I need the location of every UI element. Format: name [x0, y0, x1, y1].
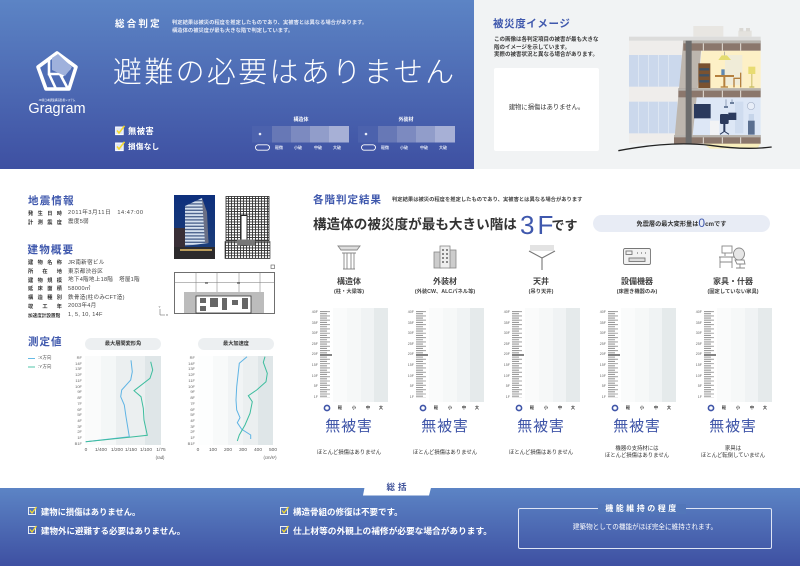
gauge: structure and exterior: 外装材 [398, 116, 414, 122]
column: equipment: 5F [602, 384, 606, 388]
column: structure: 30F [312, 331, 318, 335]
column: structure: 35F [312, 321, 318, 325]
heading: earthquake info: 地震情報 [28, 195, 75, 207]
column: exterior: 20F [408, 352, 414, 356]
chart: max acceleration: 10F [188, 384, 195, 389]
building overview rows: 竣工年 [28, 304, 62, 310]
building overview rows: JR南新宿ビル [68, 260, 105, 266]
column: exterior: 5F [410, 384, 414, 388]
chart: max acceleration: 5F [190, 412, 195, 417]
chart: max acceleration: 500 [269, 448, 277, 453]
chart: max story drift angle: 5F [77, 412, 82, 417]
earthquake info rows: 計測震度 [28, 220, 62, 226]
earthquake info rows: 発生日時 [28, 210, 62, 216]
column: structure: 5F [314, 384, 318, 388]
chart: max story drift angle: 14F [75, 361, 82, 366]
icon: ceiling [528, 245, 556, 270]
verdict note: 構造体の被災度が最も大きな階で判定しています。 [172, 28, 293, 34]
column: exterior: 30F [408, 331, 414, 335]
column: ceiling: 5F [506, 384, 510, 388]
column: ceiling: 20F [504, 352, 510, 356]
checklist: verdict: 損傷なし [128, 142, 160, 150]
drawing: floor plan: X [166, 313, 168, 317]
column: furniture: 小 [736, 404, 740, 410]
logo: Gragram [28, 51, 86, 117]
column: exterior: 小 [448, 404, 452, 410]
summary checklist [28, 506, 492, 536]
headline: most damaged floor: です [552, 218, 578, 232]
icon: building [434, 246, 456, 268]
chart: max acceleration: 12F [188, 372, 195, 377]
column: exterior: 35F [408, 321, 414, 325]
building overview rows: 地下4階地上18階 塔屋1階 [68, 277, 140, 283]
column: furniture [696, 246, 772, 459]
column: furniture: 15F [696, 363, 702, 367]
column: ceiling: 15F [504, 363, 510, 367]
column: ceiling: 小 [544, 404, 548, 410]
gauge: structure and exterior [293, 116, 414, 122]
chart: max acceleration: 4F [190, 418, 195, 423]
heading: measured values: 測定値 [28, 336, 62, 348]
chart: max acceleration: 7F [190, 401, 195, 406]
chart: max story drift angle: 11F [75, 378, 82, 383]
chart title [198, 338, 274, 350]
box text: 建築物としての機能がほぼ完全に維持されます。 [573, 524, 717, 531]
chart: max story drift angle: 4F [77, 418, 82, 423]
column: structure: 構造体 [337, 276, 361, 286]
chart: max acceleration: 100 [209, 448, 217, 453]
chart title [85, 338, 161, 350]
verdict note: 判定結果は被災の程度を推定したものであり、実被害とは異なる場合があります。 [172, 20, 367, 26]
column: structure: 無被害 [325, 418, 373, 435]
earthquake info rows: 2011年3月11日 14:47:00 [68, 210, 144, 216]
logo: Gragram: Gragram [28, 101, 86, 117]
chart: max story drift angle: 1/150 [125, 448, 137, 453]
column: furniture: 軽 [722, 404, 726, 410]
column: equipment: 35F [600, 321, 606, 325]
building overview rows: 58000㎡ [68, 286, 91, 292]
column: furniture: (固定していない家具) [707, 288, 759, 294]
summary checklist: 建物に損傷はありません。 [41, 506, 140, 516]
panel: damage image [474, 0, 800, 169]
column: furniture: 10F [696, 374, 702, 378]
chart: max acceleration [188, 338, 277, 460]
earthquake info rows: 震度5弱 [68, 219, 89, 225]
message box [494, 68, 599, 151]
column: ceiling: 無被害 [517, 418, 565, 435]
chart: max story drift angle: 6F [77, 406, 82, 412]
column: ceiling: 中 [558, 404, 562, 410]
column: furniture: 中 [750, 404, 754, 410]
chart: max story drift angle: 12F [75, 372, 82, 377]
gauge: structure and exterior: 構造体 [293, 116, 308, 122]
column: exterior [408, 246, 484, 456]
chart: max story drift angle: 9F [77, 389, 82, 394]
chart: max story drift angle: 8F [77, 395, 82, 400]
summary heading: 総括 [386, 482, 410, 492]
column: ceiling: 30F [504, 331, 510, 335]
chart: max acceleration: 1F [190, 435, 195, 440]
column: structure: 大 [379, 404, 383, 410]
column: ceiling: 25F [504, 342, 510, 346]
column: equipment: 15F [600, 363, 606, 367]
column: furniture: 30F [696, 331, 702, 335]
column: structure: 中 [366, 404, 370, 410]
checklist: verdict [115, 125, 160, 152]
column: exterior: 15F [408, 363, 414, 367]
column: furniture: 無被害 [709, 418, 757, 435]
chart: max story drift angle: 1/400 [95, 448, 107, 453]
column: exterior: 中 [462, 404, 466, 410]
column: structure: 15F [312, 363, 318, 367]
chart: max story drift angle: 3F [77, 424, 82, 429]
column: furniture: 25F [696, 342, 702, 346]
column: equipment: 1F [602, 395, 606, 399]
chart: max story drift angle: 1/200 [111, 448, 123, 453]
column: structure: ほとんど損傷はありません [317, 450, 381, 456]
column: exterior: 無被害 [421, 418, 469, 435]
chart: max acceleration: 0 [197, 448, 199, 453]
headline: most damaged floor: 構造体の被災度が最も大きい階は [313, 217, 517, 232]
damage image note: この画像は各判定項目の被害が最も大きな [494, 37, 599, 43]
column: ceiling: 1F [506, 395, 510, 399]
column: structure: 20F [312, 352, 318, 356]
gauge labels: 大破 [333, 145, 341, 150]
column: exterior: (外装CW、ALCパネル等) [415, 288, 475, 294]
column: ceiling: 10F [504, 374, 510, 378]
gauge labels: 小破 [294, 145, 302, 150]
chart: max acceleration: RF [190, 355, 195, 360]
column: structure: (柱・大梁等) [334, 288, 364, 294]
column: ceiling: ほとんど損傷はありません [509, 450, 573, 456]
column: equipment: 中 [654, 404, 658, 410]
building overview rows: 東京都渋谷区 [68, 268, 103, 274]
logo: Gragram: JR東日本建築構造監視システム [39, 98, 76, 102]
legend: directions: :Y方向 [38, 364, 52, 368]
chart: max story drift angle: 10F [75, 384, 82, 389]
illustration: building cross-section [618, 26, 772, 152]
gauge labels [255, 144, 447, 151]
panel: summary [0, 488, 800, 566]
heading: results by floor: 各階判定結果 [313, 194, 382, 206]
heading: overall verdict: 総合判定 [115, 18, 162, 30]
column: equipment [600, 248, 676, 459]
column: exterior: 軽 [434, 404, 438, 410]
chart: max story drift angle: 1/100 [140, 448, 152, 453]
column: equipment: ほとんど損傷はありません [605, 453, 669, 459]
chart: max story drift angle: 2F [77, 429, 82, 434]
column: equipment: 30F [600, 331, 606, 335]
column: furniture: 35F [696, 321, 702, 325]
column: furniture: 家具・什器 [713, 276, 753, 286]
column: exterior: 40F [408, 310, 414, 314]
chart: max acceleration: 400 [254, 448, 262, 453]
chart: max acceleration: 11F [188, 378, 195, 383]
column: ceiling: 天井 [533, 276, 549, 286]
column: ceiling: 大 [571, 404, 575, 410]
gauge labels: 大破 [439, 145, 447, 150]
chart: max acceleration: 2F [190, 429, 195, 434]
chart: max acceleration: 9F [190, 389, 195, 394]
chart: max story drift angle: RF [77, 355, 82, 360]
building overview rows [28, 259, 140, 318]
chart title: 最大層間変形角 [105, 341, 141, 347]
damage image note: 実際の被害状況と異なる場合があります。 [494, 52, 598, 58]
legend: directions [28, 354, 52, 368]
headline: most damaged floor [313, 210, 578, 240]
column: exterior: 大 [475, 404, 479, 410]
chart: max story drift angle: 0 [85, 448, 87, 453]
column: structure: 1F [314, 395, 318, 399]
chart: max story drift angle [74, 338, 166, 460]
column: equipment: 設備機器 [621, 276, 653, 286]
building overview rows: 建物名称 [28, 260, 62, 266]
message box: 建物に損傷はありません。 [509, 104, 584, 111]
photo: building [174, 195, 215, 259]
chart: max acceleration: B1F [188, 441, 195, 446]
chart: max story drift angle: 1/75 [156, 448, 166, 453]
column: furniture: 5F [698, 384, 702, 388]
column: equipment: 軽 [626, 404, 630, 410]
chart title: 最大加速度 [223, 341, 249, 347]
building overview rows: 所在地 [28, 269, 62, 275]
chart: max story drift angle: (rad) [156, 454, 164, 460]
building overview rows: 建物規模 [28, 278, 62, 284]
column: furniture: 1F [698, 395, 702, 399]
panel: overall verdict header [0, 0, 474, 169]
gauge labels: 軽微 [275, 145, 283, 150]
chart: max acceleration: 300 [239, 448, 247, 453]
drawing: floor plan [158, 264, 275, 317]
summary checklist: 建物外に避難する必要はありません。 [41, 526, 185, 536]
summary checklist: 構造骨組の修復は不要です。 [293, 506, 403, 516]
box heading: 機能維持の程度 [605, 504, 679, 513]
gauge labels: 軽微 [381, 145, 389, 150]
heading: damage image: 被災度イメージ [493, 18, 570, 30]
summary checklist: 仕上材等の外観上の補修が必要な場合があります。 [293, 526, 492, 536]
column: exterior: 1F [410, 395, 414, 399]
chart: max acceleration: (cm/s²) [263, 454, 277, 460]
damage image note: 階のイメージを示しています。 [494, 44, 570, 50]
chart: max acceleration: 6F [190, 406, 195, 412]
column: furniture: 40F [696, 310, 702, 314]
column: structure: 25F [312, 342, 318, 346]
chart: max acceleration: 200 [224, 448, 232, 453]
column: ceiling [504, 245, 580, 456]
callout: max deformation [593, 215, 770, 232]
column: structure: 軽 [338, 404, 342, 410]
column: furniture: 家具は [725, 446, 741, 452]
column: exterior: ほとんど損傷はありません [413, 450, 477, 456]
column: ceiling: (吊り天井) [529, 288, 553, 294]
column: structure [312, 246, 388, 456]
chart: max acceleration: 14F [188, 361, 195, 366]
chart: max story drift angle: 7F [77, 401, 82, 406]
column: structure: 小 [352, 404, 356, 410]
icon: furniture [719, 246, 746, 268]
results note: 判定結果は被災の程度を推定したものであり、実被害とは異なる場合があります [392, 196, 582, 202]
gauge labels: 中破 [314, 145, 322, 150]
building overview rows: 2003年4月 [68, 303, 96, 309]
column: ceiling: 40F [504, 310, 510, 314]
legend: directions: :X方向 [38, 355, 52, 360]
column: equipment: (床置き機器のみ) [617, 288, 657, 294]
column: equipment: 無被害 [613, 418, 661, 435]
building overview rows: 構造種別 [28, 295, 62, 301]
icon: pillar [337, 246, 361, 270]
callout: max deformation: 免震層の最大変形量は0cmです [637, 216, 726, 230]
chart: max story drift angle: 1F [77, 435, 82, 440]
column: exterior: 10F [408, 374, 414, 378]
drawing: floor plan: Y [158, 305, 161, 309]
building overview rows: 延床面積 [28, 286, 62, 292]
column: exterior: 25F [408, 342, 414, 346]
column: equipment: 機器の支持材には [615, 446, 659, 452]
column: furniture: 大 [763, 404, 767, 410]
headline: most damaged floor: 3F [520, 210, 556, 240]
verdict note [172, 19, 367, 34]
column: equipment: 大 [667, 404, 671, 410]
chart: max acceleration: 13F [188, 366, 195, 371]
checklist: verdict: 無被害 [128, 126, 154, 136]
box: function maintenance [518, 508, 772, 549]
verdict title: 避難の必要はありません [113, 57, 456, 89]
building overview rows: 鉄骨造(柱のみCFT造) [68, 294, 125, 300]
building overview rows: 加速度計設置階 [28, 312, 60, 318]
chart: max acceleration: 8F [190, 395, 195, 400]
column: equipment: 40F [600, 310, 606, 314]
heading: building overview: 建物概要 [28, 244, 74, 256]
column: ceiling: 35F [504, 321, 510, 325]
earthquake info rows [28, 209, 144, 226]
gauge labels: 小破 [400, 145, 408, 150]
column: structure: 40F [312, 310, 318, 314]
column: structure: 10F [312, 374, 318, 378]
icon: equipment [623, 248, 651, 265]
gauge labels: 中破 [420, 145, 428, 150]
chart: max story drift angle: B1F [75, 441, 82, 446]
building overview rows: 1, 5, 10, 14F [68, 312, 103, 318]
damage image note [494, 36, 599, 58]
column: equipment: 小 [640, 404, 644, 410]
column: furniture: 20F [696, 352, 702, 356]
column: exterior: 外装材 [433, 276, 457, 286]
column: equipment: 10F [600, 374, 606, 378]
summary tab [363, 488, 431, 496]
drawing: building elevation section [224, 196, 270, 259]
column: furniture: ほとんど転倒していません [701, 453, 765, 459]
column: equipment: 20F [600, 352, 606, 356]
chart: max acceleration: 3F [190, 424, 195, 429]
column: equipment: 25F [600, 342, 606, 346]
column: ceiling: 軽 [530, 404, 534, 410]
chart: max story drift angle: 13F [75, 366, 82, 371]
